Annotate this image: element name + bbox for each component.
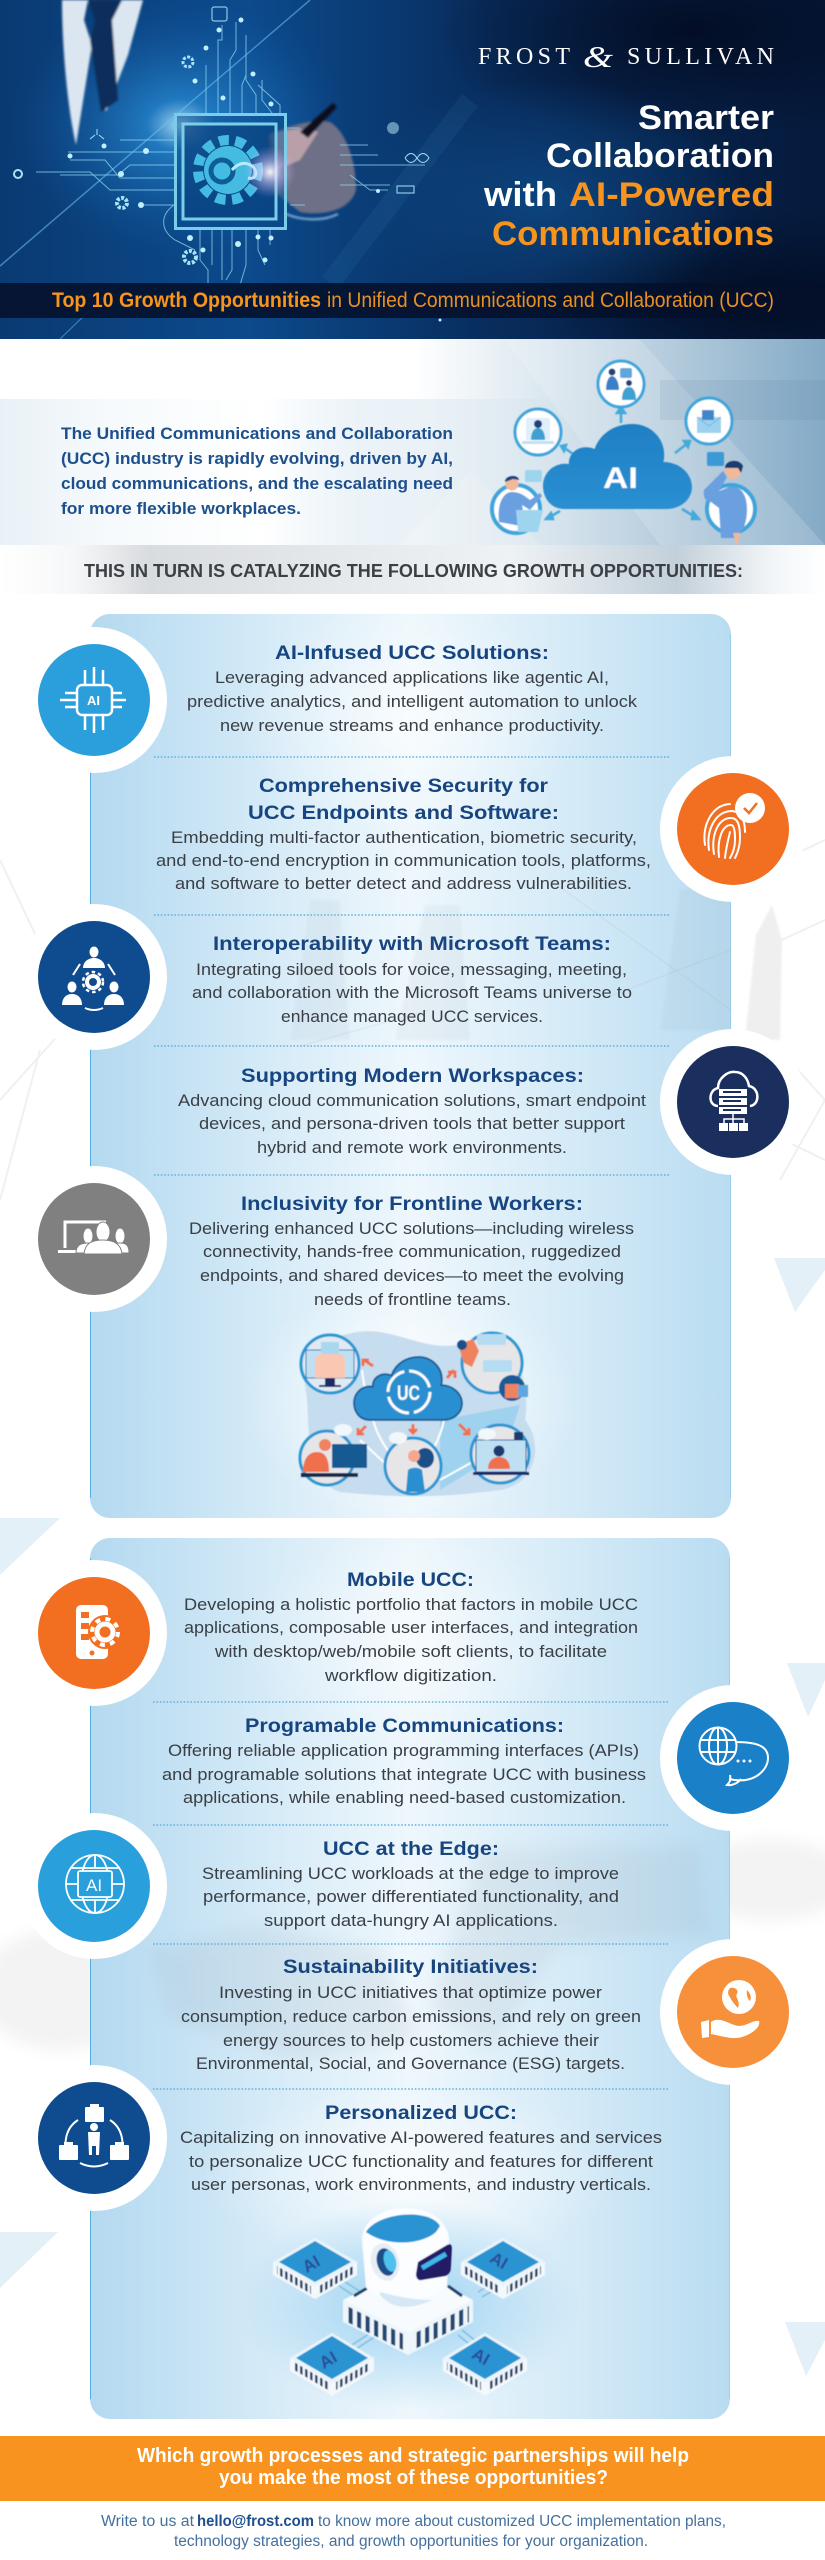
item: Comprehensive Security: and software to better detect and address vulnerabilities. (175, 874, 632, 893)
circuit nodes (68, 18, 442, 322)
chip bottom-right: AI (469, 2344, 493, 2369)
faint silhouettes inside panel (290, 880, 731, 1040)
footer contact text: to know more about customized UCC implementation plans, (318, 2513, 726, 2530)
chip top-left (273, 2238, 357, 2299)
icon: cloud server circle (660, 1029, 806, 1175)
item: Programable Communications: and programable solutions that integrate UCC with business (162, 1765, 646, 1784)
illustration: AI cloud (492, 361, 755, 547)
item: Interoperability: Interoperability with Microsoft Teams: (213, 933, 611, 955)
cloud (354, 1357, 462, 1420)
item: Sustainability: consumption, reduce carbon emissions, and rely on green (181, 2007, 641, 2026)
icon: shirt and tie (62, 0, 143, 145)
intro text: cloud communications, and the escalating need (61, 474, 453, 493)
item: Sustainability: Environmental, Social, and Governance (ESG) targets. (196, 2054, 625, 2073)
item: UCC at the Edge (202, 1838, 619, 1930)
item: Mobile UCC: Developing a holistic portfolio that factors in mobile UCC (184, 1595, 638, 1614)
item: Comprehensive Security: UCC Endpoints and Software: (248, 802, 559, 824)
subtitle band: in Unified Communications and Collaboration (UCC) (327, 289, 774, 312)
item: Comprehensive Security (156, 775, 651, 893)
item: Comprehensive Security: Comprehensive Security for (259, 775, 548, 797)
chip bottom-left: AI (316, 2348, 340, 2373)
chip top-right (461, 2238, 545, 2299)
item: Programable Communications: Programable Communications: (245, 1715, 564, 1737)
chip bottom-right (443, 2333, 527, 2396)
title: AI-Powered (569, 176, 774, 214)
panel: opportunities group two (90, 1530, 730, 2419)
band: call to action: you make the most of these opportunities? (219, 2467, 608, 2489)
item: AI-Infused UCC Solutions: predictive analytics, and intelligent automation to unlock (187, 692, 638, 711)
dividers (154, 757, 670, 1175)
panel: intro (0, 339, 825, 594)
icon: AI chip circle (21, 627, 167, 773)
icon: hand and pen (268, 103, 356, 219)
title: with (483, 176, 557, 214)
item: Comprehensive Security: Embedding multi-factor authentication, biometric security, (171, 828, 637, 847)
icon: team gear circle (21, 904, 167, 1050)
header photo banner (0, 0, 825, 390)
intro text: (UCC) industry is rapidly evolving, driven by AI, (61, 449, 453, 468)
item: Personalized UCC: Personalized UCC: (325, 2102, 517, 2124)
item: UCC at the Edge: Streamlining UCC workloads at the edge to improve (202, 1864, 619, 1883)
circuit traces (36, 22, 425, 285)
dividers (153, 1702, 669, 2089)
title: Communications (492, 215, 774, 253)
base (343, 2267, 473, 2355)
person: left with laptop (492, 470, 543, 533)
title: Collaboration (546, 137, 774, 175)
item: Interoperability: and collaboration with the Microsoft Teams universe to (192, 983, 632, 1002)
chip top-right: AI (487, 2248, 511, 2273)
item: Modern Workspaces (178, 1065, 646, 1157)
intro text: The Unified Communications and Collaboration (61, 424, 453, 443)
logo: Frost & Sullivan: FROST (478, 44, 570, 70)
cloud (543, 424, 692, 509)
item: Personalized UCC: to personalize UCC functionality and features for different (189, 2152, 653, 2171)
circle: video call (515, 409, 561, 455)
item: Personalized UCC: user personas, work environments, and industry verticals. (191, 2175, 651, 2194)
item: Programable Communications: applications, while enabling need-based customization. (183, 1788, 626, 1807)
title: Smarter (638, 99, 774, 137)
item: Personalized UCC: Capitalizing on innovative AI-powered features and services (180, 2128, 662, 2147)
faint robot hand ghost (150, 1845, 710, 2060)
item: Comprehensive Security: and end-to-end encryption in communication tools, platforms, (156, 851, 651, 870)
small tech glyphs (14, 7, 429, 263)
item: Interoperability: Integrating siloed tools for voice, messaging, meeting, (196, 960, 627, 979)
item: Mobile UCC: applications, composable user interfaces, and integration (184, 1618, 638, 1637)
item: Modern Workspaces: hybrid and remote work environments. (257, 1138, 567, 1157)
item: UCC at the Edge: support data-hungry AI applications. (264, 1911, 558, 1930)
person: right on phone (704, 452, 755, 547)
item: Mobile UCC: with desktop/web/mobile soft clients, to facilitate (214, 1642, 607, 1661)
item: Frontline Workers (189, 1193, 634, 1309)
item: Frontline Workers: Inclusivity for Frontline Workers: (241, 1193, 583, 1215)
illustration: UC cloud (300, 1331, 535, 1496)
circle: woman on phone (385, 1432, 441, 1494)
icon: fingerprint circle (660, 756, 806, 902)
intro text (61, 424, 453, 518)
item: Personalized UCC (180, 2102, 662, 2194)
light streaks (0, 0, 470, 339)
background decorative triangles (0, 1258, 825, 2376)
band: catalyzing heading (0, 545, 825, 594)
item: Frontline Workers: endpoints, and shared devices—to meet the evolving (200, 1266, 624, 1285)
panel: opportunities group one (90, 600, 731, 1520)
logo: Frost & Sullivan (478, 39, 774, 74)
footer contact text: technology strategies, and growth opportunities for your organization. (174, 2533, 648, 2550)
footer contact text (101, 2513, 726, 2550)
title (483, 99, 774, 253)
item: Sustainability: energy sources to help customers achieve their (223, 2031, 599, 2050)
item: Sustainability: Sustainability Initiatives: (283, 1956, 538, 1978)
item: Frontline Workers: Delivering enhanced UCC solutions—including wireless (189, 1219, 634, 1238)
item: Interoperability: enhance managed UCC services. (281, 1007, 543, 1026)
icon: AI chip circle: AI (87, 693, 100, 708)
item: AI-Infused UCC Solutions: Leveraging advanced applications like agentic AI, (215, 668, 609, 687)
circle: meeting (598, 361, 644, 407)
band: catalyzing heading: THIS IN TURN IS CATALYZING THE FOLLOWING GROWTH OPPORTUNITIES: (84, 560, 743, 581)
illustration: AI robot and chips (238, 2200, 578, 2410)
circle: email (301, 1335, 359, 1393)
footer contact text: hello@frost.com (197, 2513, 314, 2530)
circle: email (686, 398, 732, 444)
circle: video call (471, 1425, 529, 1483)
item: Programable Communications: Offering reliable application programming interfaces (APIs) (168, 1741, 639, 1760)
item: Modern Workspaces: Supporting Modern Workspaces: (241, 1065, 584, 1087)
icon: frontline workers circle (21, 1166, 167, 1312)
item: UCC at the Edge: UCC at the Edge: (323, 1838, 499, 1860)
item: Modern Workspaces: Advancing cloud communication solutions, smart endpoint (178, 1091, 646, 1110)
item: Programable Communications (162, 1715, 646, 1807)
chip top-left: AI (299, 2252, 323, 2277)
cloud: UC (397, 1382, 420, 1405)
item: Sustainability: Investing in UCC initiatives that optimize power (219, 1983, 602, 2002)
item: Modern Workspaces: devices, and persona-driven tools that better support (199, 1114, 625, 1133)
item: Frontline Workers: connectivity, hands-free communication, ruggedized (203, 1242, 621, 1261)
arrows (546, 407, 699, 519)
subtitle band: Top 10 Growth Opportunities (52, 289, 321, 312)
icon: AI globe circle: AI (86, 1876, 102, 1895)
band: call to action (0, 2436, 825, 2501)
footer contact text: Write to us at (101, 2513, 195, 2530)
robot head (362, 2208, 452, 2307)
item: Interoperability (192, 933, 632, 1026)
arrows (358, 1360, 469, 1434)
background faint network and silhouettes (0, 840, 825, 2050)
icon: globe chat circle (660, 1685, 806, 1831)
icon: mobile gear circle (21, 1560, 167, 1706)
item: Sustainability (181, 1956, 641, 2073)
logo: Frost & Sullivan: SULLIVAN (627, 44, 774, 70)
item: Mobile UCC: workflow digitization. (324, 1666, 497, 1685)
chip bottom-left (290, 2333, 374, 2396)
item: AI-Infused UCC Solutions (187, 642, 638, 735)
logo: Frost & Sullivan: & (583, 39, 613, 74)
item: Mobile UCC: Mobile UCC: (347, 1569, 474, 1591)
item: Frontline Workers: needs of frontline teams. (314, 1290, 511, 1309)
circle: chat (457, 1333, 528, 1401)
icon: AI globe circle (21, 1813, 167, 1959)
intro text: for more flexible workplaces. (61, 499, 301, 518)
band: call to action: Which growth processes and strategic partnerships will help (137, 2445, 689, 2467)
subtitle band (0, 283, 825, 318)
chip frame with gear (176, 114, 296, 228)
icon: persona briefcases circle (21, 2065, 167, 2211)
circle: desktop agent (300, 1424, 367, 1485)
item: UCC at the Edge: performance, power differentiated functionality, and (203, 1887, 619, 1906)
item: AI-Infused UCC Solutions: new revenue streams and enhance productivity. (220, 716, 604, 735)
icon: earth in hand circle (660, 1939, 806, 2085)
item: Mobile UCC (184, 1569, 638, 1685)
item: AI-Infused UCC Solutions: AI-Infused UCC Solutions: (275, 642, 549, 664)
illustration: AI cloud: AI (603, 462, 638, 495)
